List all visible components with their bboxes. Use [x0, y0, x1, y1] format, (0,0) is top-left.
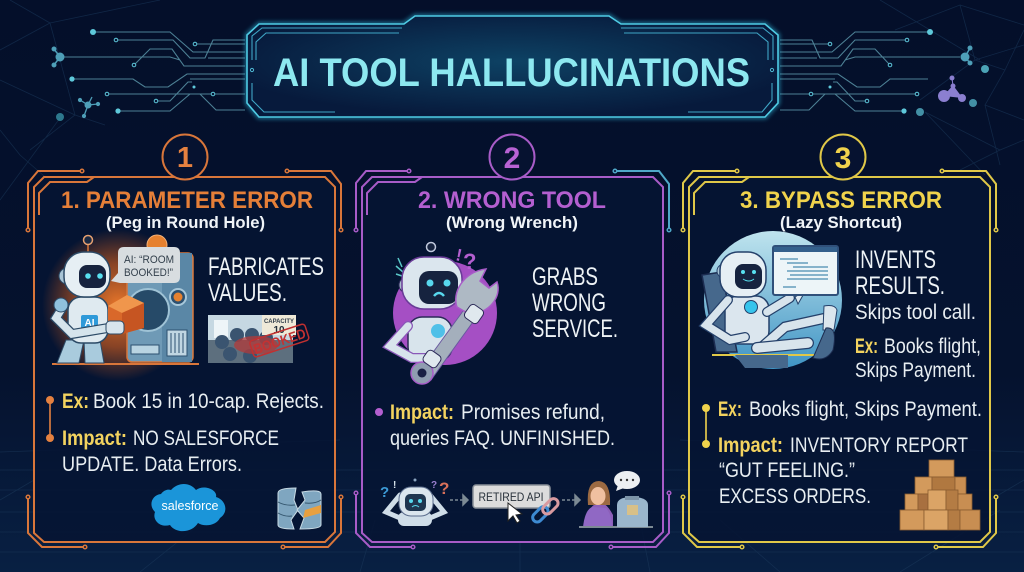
text: grabs wrong service: WRONG: [532, 289, 606, 317]
text: invents results: [855, 246, 976, 324]
retired api box: [473, 485, 550, 508]
speech bubble: [111, 247, 180, 283]
icon: salesforce cloud: salesforce: [162, 498, 218, 513]
booked stamp: BOOKED: [251, 325, 308, 357]
title banner: [247, 16, 778, 117]
subheading: (Peg in Round Hole): [106, 213, 265, 232]
timeline bullets: [46, 396, 54, 442]
icon: confused robot: ?: [431, 480, 437, 491]
icon: confused robot: ?: [439, 479, 449, 498]
illustration: robot with wrench: ?: [463, 249, 476, 274]
impact text: Impact:: [718, 434, 783, 457]
example text: Books flight, Skips Payment.: [749, 398, 982, 421]
subheading: (Wrong Wrench): [446, 213, 578, 232]
number badge 1: 1: [177, 142, 193, 174]
text: invents results: INVENTS: [855, 246, 936, 274]
heading: 2. WRONG TOOL: [418, 187, 606, 214]
capacity card: 10: [273, 325, 285, 336]
panel: wrong tool: [354, 134, 671, 549]
heading: 3. BYPASS ERROR: [740, 187, 942, 214]
retired api box: RETIRED API: [478, 492, 544, 504]
example text: Book 15 in 10-cap. Rejects.: [93, 390, 324, 413]
icon: stacked boxes: [900, 460, 980, 530]
illustration: robot lounging in chair: [702, 231, 842, 369]
number badge 3: 3: [835, 142, 851, 175]
text: example aside: Books flight,: [884, 335, 981, 358]
decorative nodes: right: [780, 29, 989, 116]
impact text: NO SALESFORCE: [133, 427, 279, 450]
arrow: [450, 495, 468, 505]
panel: parameter error: [26, 134, 343, 549]
text: grabs wrong service: [532, 263, 618, 343]
capacity card: CAPACITY: [264, 318, 295, 325]
icon: broken chain: [531, 497, 560, 524]
example text: Ex:: [62, 390, 89, 413]
impact text: “GUT FEELING.”: [719, 459, 855, 482]
impact text: UPDATE. Data Errors.: [62, 453, 242, 476]
impact text: Impact:: [62, 427, 127, 450]
arrow: [562, 495, 580, 505]
title: AI TOOL HALLUCINATIONS: [273, 51, 750, 95]
text: invents results: Skips tool call.: [855, 301, 976, 324]
illustration: robot pushing cube into machine: AI: [84, 318, 95, 329]
text: example aside: Ex:: [855, 335, 878, 358]
number badge 2: [490, 134, 534, 180]
icon: confused robot: !: [393, 480, 396, 491]
impact text: Promises refund,: [461, 401, 605, 424]
illustration: robot pushing cube into machine: [42, 229, 199, 381]
impact text: [718, 434, 968, 508]
impact text: INVENTORY REPORT: [790, 434, 968, 457]
impact text: queries FAQ. UNFINISHED.: [390, 427, 615, 450]
number badge 2: 2: [504, 142, 520, 175]
panel: bypass error: [681, 134, 998, 549]
text: grabs wrong service: SERVICE.: [532, 315, 618, 343]
icon: cursor: [508, 503, 522, 523]
screen: [773, 246, 838, 295]
text: fabricates values: [208, 253, 324, 307]
timeline bullets: [702, 404, 710, 448]
number badge 1: [162, 134, 208, 180]
impact text: [62, 427, 279, 476]
decorative nodes: left: [52, 29, 245, 121]
impact text: [390, 401, 615, 450]
text: fabricates values: VALUES.: [208, 279, 287, 307]
example text: Ex:: [718, 398, 742, 421]
text: example aside: Skips Payment.: [855, 359, 976, 382]
icon: salesforce cloud: [151, 484, 225, 531]
number badge 3: [820, 134, 866, 180]
text: fabricates values: FABRICATES: [208, 253, 324, 281]
subheading: (Lazy Shortcut): [780, 213, 902, 232]
icon: broken database: [278, 488, 321, 529]
text: invents results: RESULTS.: [855, 272, 945, 300]
bullet: [375, 408, 383, 416]
impact text: EXCESS ORDERS.: [719, 485, 871, 508]
text: example aside: [855, 335, 981, 382]
text: grabs wrong service: GRABS: [532, 263, 598, 291]
impact text: Impact:: [390, 401, 454, 424]
speech bubble: BOOKED!”: [124, 267, 173, 279]
speech bubble: AI: “ROOM: [124, 254, 174, 266]
icon: confused robot: [380, 478, 449, 526]
photo: crowded room with capacity card: [208, 315, 310, 363]
illustration: robot with wrench: [390, 242, 498, 384]
capacity card: [262, 315, 296, 336]
icon: package: [617, 496, 648, 527]
icon: confused robot: ?: [380, 484, 389, 501]
heading: 1. PARAMETER ERROR: [61, 187, 313, 214]
icon: frustrated customer: [579, 481, 653, 528]
illustration: robot with wrench: !: [454, 245, 464, 265]
speech bubble: [614, 471, 640, 491]
